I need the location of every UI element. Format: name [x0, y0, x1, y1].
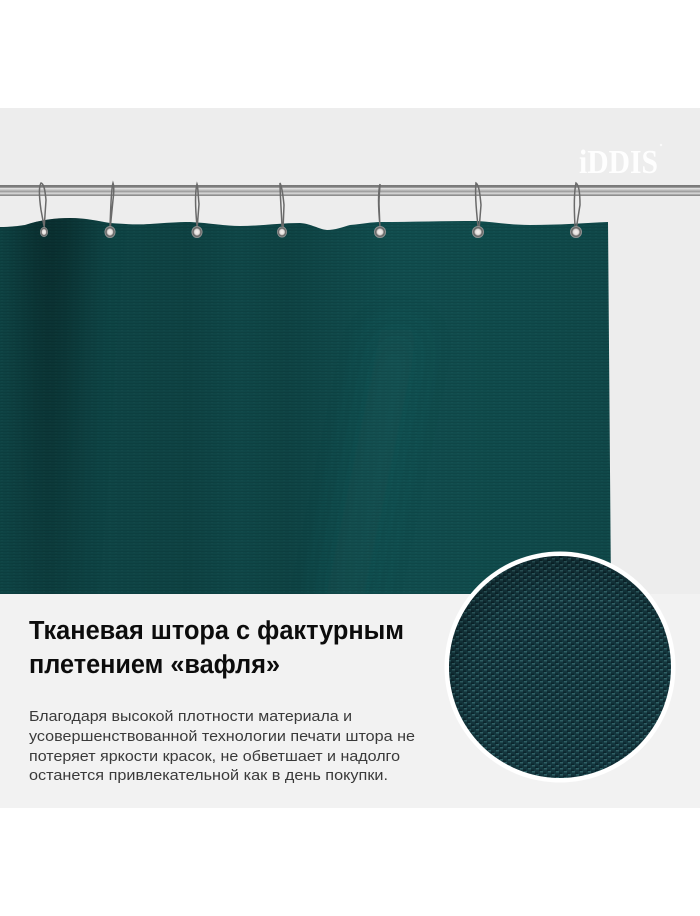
hook 6: [472, 183, 484, 238]
shower curtain: [0, 218, 611, 594]
fabric close-up circle: [444, 552, 676, 782]
lower text panel: [0, 594, 700, 808]
description text: [29, 709, 415, 784]
background panel: [0, 108, 700, 808]
heading: плетением «вафля»: [29, 651, 280, 679]
curtain hooks and eyelets: [40, 183, 582, 238]
hook 2: [104, 183, 116, 238]
heading: [29, 617, 404, 679]
description text: останется привлекательной как в день покупки.: [29, 768, 388, 784]
logo: iDDIS: [579, 144, 658, 181]
curtain rod: [0, 185, 700, 196]
hook 5: [374, 184, 386, 238]
hook 4: [277, 183, 287, 238]
description text: Благодаря высокой плотности материала и: [29, 709, 352, 725]
heading: Тканевая штора с фактурным: [29, 617, 404, 645]
hook 3: [192, 184, 202, 238]
description text: усовершенствованной технологии печати штора не: [29, 729, 415, 745]
hook 1: [40, 183, 48, 237]
description text: потеряет яркости красок, не обветшает и надолго: [29, 749, 400, 765]
hook 7: [570, 183, 582, 238]
